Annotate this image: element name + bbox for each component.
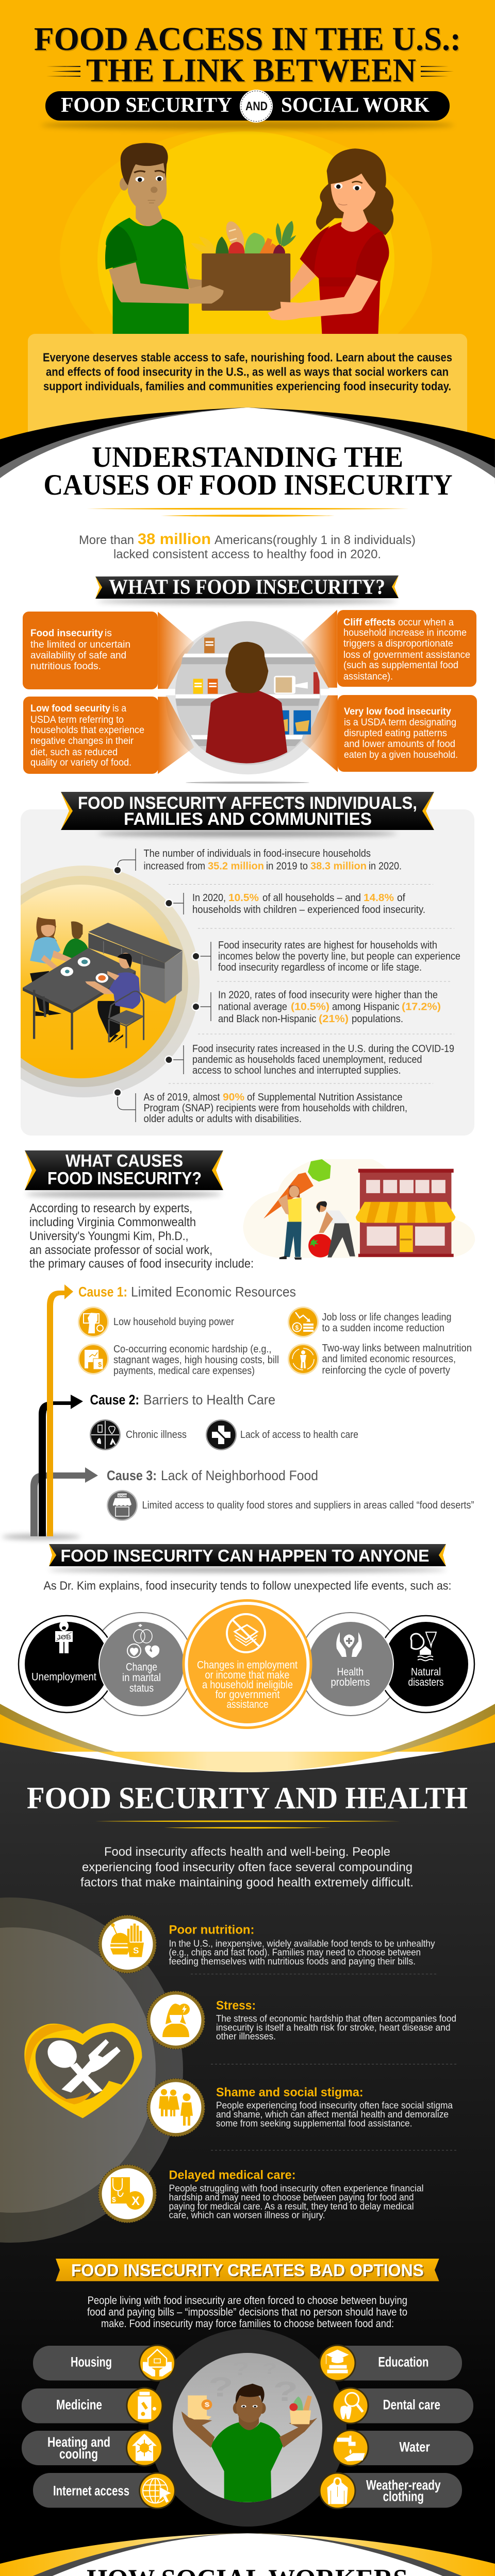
icon: heart with spoon and fork bbox=[24, 2023, 142, 2118]
center disc: man weighing choices: $ bbox=[205, 2402, 209, 2409]
factor: delayed medical care: hardship and may need to choose between paying for food and bbox=[169, 2192, 414, 2202]
health dividers bbox=[191, 1974, 458, 2150]
box: very low food insecurity: eaten by a given household. bbox=[344, 750, 458, 760]
event: changes in employment or income: Changes in employment bbox=[197, 1659, 298, 1671]
stat 3: food insecurity regardless of income or life stage. bbox=[218, 962, 422, 973]
box: food insecurity bbox=[23, 612, 158, 689]
section title: food security and health: FOOD SECURITY AND HEALTH bbox=[27, 1781, 468, 1815]
black arrow bbox=[39, 1395, 83, 1536]
health intro: experiencing food insecurity often face several compounding bbox=[82, 1860, 412, 1874]
stat 2: of all households – and bbox=[262, 892, 361, 904]
unemployment icon and label bbox=[31, 1621, 96, 1683]
event: unemployment bbox=[19, 1616, 116, 1713]
event: marital status: Change bbox=[126, 1661, 157, 1673]
stat 1: in 2020. bbox=[369, 860, 402, 872]
stat 1: 38.3 million bbox=[310, 860, 367, 872]
stat 2: 10.5% bbox=[228, 892, 259, 904]
event: changes in employment or income: assistance bbox=[227, 1699, 268, 1710]
factor: stress: Stress: bbox=[216, 1998, 256, 2012]
event: natural disasters bbox=[377, 1616, 474, 1713]
box: cliff effects: occur when a bbox=[398, 617, 454, 628]
box: very low food insecurity: Very low food insecurity bbox=[344, 706, 451, 717]
event: changes in employment or income: for government bbox=[216, 1689, 280, 1701]
bad options intro bbox=[87, 2295, 407, 2330]
banner: can happen to anyone bbox=[49, 1544, 446, 1572]
event: natural disasters: Natural bbox=[411, 1666, 441, 1678]
event: changes in employment or income: or income that make bbox=[205, 1669, 290, 1681]
stat 5: pandemic as households faced unemployment, reduced bbox=[192, 1054, 422, 1065]
box: cliff effects: Cliff effects bbox=[343, 617, 395, 628]
hero section bbox=[0, 0, 495, 448]
stat 4: and Black non-Hispanic bbox=[218, 1013, 317, 1025]
banner: creates bad options: FOOD INSECURITY CREATES BAD OPTIONS bbox=[71, 2261, 424, 2280]
center illustration: person at shelves bbox=[158, 610, 338, 774]
box: low food security bbox=[23, 697, 158, 774]
dividers bbox=[169, 884, 454, 1083]
event: changes in employment or income: a household ineligible bbox=[202, 1679, 293, 1691]
option: weather-ready clothing: Weather-ready bbox=[366, 2477, 441, 2493]
stat 2 bbox=[164, 892, 425, 916]
stat 4: (17.2%) bbox=[402, 1002, 441, 1013]
health intro bbox=[80, 1845, 414, 1890]
ribbon: food insecurity affects: FOOD INSECURITY AFFECTS INDIVIDUALS, bbox=[78, 793, 417, 813]
option: education bbox=[319, 2344, 462, 2381]
box: very low food insecurity: is a USDA term designating bbox=[344, 717, 456, 728]
curved transition into social work section bbox=[0, 2533, 495, 2576]
factor: delayed medical care: People struggling with food insecurity often experience financial bbox=[169, 2183, 424, 2194]
factor: shame and social stigma: and shame, which can affect mental health and demoralize bbox=[216, 2109, 449, 2120]
option: housing: Housing bbox=[71, 2354, 112, 2370]
factor: stress: other illnesses. bbox=[216, 2031, 276, 2041]
option: internet access: Internet access bbox=[53, 2483, 129, 2499]
stat 1: The number of individuals in food-insecure households bbox=[143, 848, 371, 859]
box: food insecurity: availability of safe and bbox=[30, 650, 126, 661]
stat 5: Food insecurity rates increased in the U.S. during the COVID-19 bbox=[192, 1043, 454, 1055]
icon: store: STORE bbox=[118, 1495, 128, 1498]
icon: bills: $ bbox=[98, 1361, 102, 1368]
icon: income loss bbox=[288, 1307, 319, 1337]
cause 1: Job loss or life changes leading bbox=[322, 1312, 452, 1323]
stat 6: of Supplemental Nutrition Assistance bbox=[247, 1092, 402, 1103]
cause 1: reinforcing the cycle of poverty bbox=[322, 1365, 450, 1376]
factor: delayed medical care: care, which can worsen illness or injury. bbox=[169, 2210, 325, 2220]
factor: shame and social stigma: People experiencing food insecurity often face social stigma bbox=[216, 2100, 453, 2111]
box: cliff effects: triggers a disproportionate bbox=[343, 638, 453, 649]
icon: store bbox=[107, 1490, 138, 1521]
causes intro text bbox=[29, 1201, 254, 1271]
gray arrow bbox=[30, 1467, 98, 1536]
life events circles bbox=[19, 1599, 474, 1729]
causes intro text: According to research by experts, bbox=[29, 1201, 192, 1215]
illustration: family at table bbox=[23, 917, 183, 1049]
title pill: SOCIAL WORK bbox=[281, 93, 430, 116]
event: health problems: problems bbox=[331, 1676, 370, 1688]
health intro: Food insecurity affects health and well-being. People bbox=[104, 1845, 390, 1859]
box: low food security: USDA term referring to bbox=[30, 715, 124, 725]
factor: poor nutrition: Poor nutrition: bbox=[169, 1923, 255, 1937]
causes intro text: the primary causes of food insecurity include: bbox=[29, 1257, 254, 1271]
cause 1: Limited Economic Resources bbox=[131, 1284, 296, 1299]
bad options intro: make. Food insecurity may force families to choose between food and: bbox=[101, 2318, 394, 2330]
cause 1: Co-occurring economic hardship (e.g., bbox=[113, 1344, 271, 1355]
option: heating and cooling: cooling bbox=[59, 2446, 98, 2462]
main title: THE LINK BETWEEN bbox=[86, 52, 416, 89]
option: housing bbox=[33, 2344, 176, 2381]
box: low food security: negative changes in their bbox=[30, 736, 134, 747]
factor: delayed medical care bbox=[98, 2165, 424, 2223]
option: weather-ready clothing: clothing bbox=[383, 2489, 424, 2504]
causes intro text: including Virginia Commonwealth bbox=[29, 1215, 196, 1229]
center disc: man weighing choices: ? bbox=[208, 2371, 234, 2402]
box: cliff effects: (such as supplemental food bbox=[343, 660, 458, 671]
option: heating and cooling: Heating and bbox=[47, 2434, 110, 2450]
stat 3: incomes below the poverty line, but people can experience bbox=[218, 951, 460, 962]
intro panel bbox=[28, 334, 467, 447]
stat 2: of bbox=[397, 892, 405, 904]
factor: poor nutrition: feeding themselves with nutritious foods and paying their bills. bbox=[169, 1956, 416, 1967]
life events intro: As Dr. Kim explains, food insecurity tends to follow unexpected life events, such as: bbox=[43, 1579, 452, 1592]
stat intro: 38 million: lacked consistent access to healthy food in 2020. bbox=[113, 548, 381, 562]
section title: understanding the causes: UNDERSTANDING THE bbox=[92, 441, 403, 473]
cause 1: Two-way links between malnutrition bbox=[322, 1343, 472, 1354]
event: marital status: in marital bbox=[122, 1672, 161, 1684]
stat 4: national average bbox=[218, 1002, 287, 1013]
banner: creates bad options: FOOD INSECURITY CREATES BAD OPTIONS bbox=[72, 2262, 425, 2281]
stat 4: populations. bbox=[352, 1013, 403, 1025]
causes intro text: University's Youngmi Kim, Ph.D., bbox=[29, 1229, 189, 1243]
bad options intro: People living with food insecurity are often forced to choose between buying bbox=[88, 2295, 407, 2307]
icon: medical bill: X bbox=[131, 2194, 140, 2208]
option: water bbox=[332, 2430, 473, 2467]
banner: what causes food insecurity bbox=[25, 1150, 223, 1198]
section title: understanding the causes bbox=[43, 441, 453, 517]
cause 3: Cause 3: bbox=[107, 1468, 157, 1483]
icon: chronic illness bbox=[90, 1419, 121, 1450]
ribbon: food insecurity affects bbox=[61, 792, 434, 837]
event: natural disasters: disasters bbox=[408, 1676, 443, 1688]
man bbox=[105, 143, 223, 334]
woman bbox=[268, 148, 393, 334]
stat 2: In 2020, bbox=[192, 892, 226, 904]
factor: stress: insecurity is itself a health risk for stroke, heart disease and bbox=[216, 2023, 451, 2033]
backdrop circles and heart icon bbox=[0, 1897, 183, 2243]
factor: delayed medical care: paying for medical care. As a result, they tend to delay medical bbox=[169, 2201, 414, 2211]
factor: stress bbox=[147, 1991, 456, 2049]
box: low food security: Low food security bbox=[30, 703, 110, 714]
icon: stressed woman bbox=[147, 1991, 205, 2049]
icon: medical bill: $ bbox=[112, 2195, 116, 2204]
box: food insecurity: Food insecurity bbox=[30, 628, 103, 639]
panel: food insecurity affects bbox=[0, 792, 474, 1136]
cause 1: Cause 1: bbox=[78, 1284, 127, 1299]
box: low food security: diet, such as reduced bbox=[30, 747, 118, 758]
illustration: man and woman sharing a food box bbox=[105, 143, 393, 334]
cause 2: Cause 2: bbox=[90, 1392, 139, 1408]
cause 3 bbox=[107, 1468, 474, 1521]
unemployment icon and label: Unemployment bbox=[31, 1671, 96, 1683]
title pill bbox=[41, 90, 454, 130]
stat 1: in 2019 to bbox=[266, 860, 308, 872]
box: food insecurity: is bbox=[105, 628, 112, 639]
option: water: Water bbox=[399, 2439, 430, 2454]
banner: what causes food insecurity: FOOD INSECURITY? bbox=[47, 1168, 202, 1188]
center disc: man weighing choices: ? bbox=[232, 2358, 250, 2379]
box: low food security: quality or variety of food. bbox=[30, 757, 131, 768]
cause 2: Barriers to Health Care bbox=[143, 1392, 275, 1408]
center disc: man weighing choices: ? bbox=[262, 2360, 277, 2378]
curved transition into causes section bbox=[0, 408, 495, 585]
circle backdrop bbox=[21, 866, 200, 1097]
cause 2 bbox=[90, 1392, 358, 1450]
option: medicine: Medicine bbox=[56, 2397, 102, 2412]
cause 3: Lack of Neighborhood Food bbox=[161, 1468, 318, 1483]
stat 6: older adults or adults with disabilities. bbox=[143, 1113, 302, 1125]
box: very low food insecurity bbox=[338, 695, 477, 772]
box: cliff effects bbox=[337, 610, 476, 687]
cause arrows bbox=[2, 1284, 98, 1539]
stat 6 bbox=[113, 1088, 407, 1125]
banner: what is food insecurity: WHAT IS FOOD INSECURITY? bbox=[109, 575, 385, 599]
event: health problems bbox=[307, 1621, 394, 1707]
icon: fast food: S bbox=[133, 1946, 139, 1956]
cause 1: to a sudden income reduction bbox=[322, 1323, 444, 1334]
box: cliff effects: assistance). bbox=[343, 671, 393, 682]
box: very low food insecurity: disrupted eating patterns bbox=[344, 728, 447, 739]
stat 6: As of 2019, almost bbox=[143, 1092, 220, 1103]
food box bbox=[188, 219, 303, 320]
factor: poor nutrition: (e.g., chips and fast food). Families may need to choose between bbox=[169, 1947, 421, 1958]
stat 4: among Hispanic bbox=[332, 1002, 399, 1013]
icon: cycle bbox=[288, 1344, 319, 1375]
option: heating and cooling bbox=[22, 2430, 163, 2467]
box: food insecurity: the limited or uncertain bbox=[30, 639, 130, 650]
center disc: man weighing choices: ? bbox=[273, 2376, 298, 2407]
stat 6: Program (SNAP) recipients were from households with children, bbox=[143, 1103, 407, 1114]
box: cliff effects: household increase in income bbox=[343, 628, 467, 638]
option: weather-ready clothing bbox=[319, 2472, 462, 2509]
icon: fast food bbox=[98, 1916, 156, 1973]
stat 5: access to school lunches and interrupted supplies. bbox=[192, 1065, 401, 1076]
stat 4: (21%) bbox=[319, 1013, 349, 1025]
factor: shame and social stigma: some from seeking supplemental food assistance. bbox=[216, 2119, 412, 2129]
event: health problems: Health bbox=[337, 1666, 364, 1678]
factor: poor nutrition: In the U.S., inexpensive, widely available food tends to be unhealthy bbox=[169, 1938, 435, 1948]
icon: group of people bbox=[147, 2079, 205, 2137]
cause 2: Lack of access to health care bbox=[240, 1429, 358, 1440]
center disc: man weighing choices bbox=[148, 2329, 346, 2527]
cause 2: Chronic illness bbox=[126, 1429, 187, 1440]
option: dental care bbox=[332, 2387, 473, 2424]
option: education: Education bbox=[378, 2354, 428, 2370]
stat 4 bbox=[192, 989, 441, 1025]
stat 1: increased from bbox=[143, 860, 205, 872]
decorative speed lines bbox=[46, 66, 454, 77]
stat 3: Food insecurity rates are highest for households with bbox=[218, 940, 437, 951]
option pills bbox=[22, 2344, 473, 2509]
option: dental care: Dental care bbox=[383, 2397, 440, 2412]
box: low food security: is a bbox=[112, 703, 126, 714]
gold arrow bbox=[47, 1284, 73, 1536]
stat intro: 38 million: More than bbox=[79, 533, 134, 547]
factor: stress: The stress of economic hardship that often accompanies food bbox=[216, 2013, 456, 2024]
main title: FOOD ACCESS IN THE U.S.: bbox=[34, 21, 461, 58]
option: medicine bbox=[22, 2387, 163, 2424]
event: marital status: status bbox=[129, 1683, 154, 1694]
stat 1: 35.2 million bbox=[208, 860, 264, 872]
cause 1: and limited economic resources, bbox=[322, 1353, 456, 1365]
stat 4: In 2020, rates of food insecurity were higher than the bbox=[218, 989, 438, 1001]
ribbon: food insecurity affects: FAMILIES AND COMMUNITIES bbox=[124, 809, 372, 829]
event: marital status bbox=[98, 1621, 185, 1707]
curved transition into health section bbox=[0, 1704, 495, 2576]
bad options intro: food and paying bills – “impossible” decisions that no person should have to bbox=[87, 2306, 407, 2318]
factor: shame and social stigma: Shame and social stigma: bbox=[216, 2086, 364, 2099]
event: changes in employment or income bbox=[183, 1599, 312, 1729]
icon: income loss: $ bbox=[295, 1324, 299, 1331]
stat 2: 14.8% bbox=[364, 892, 394, 904]
icon: buying power bbox=[78, 1307, 109, 1337]
box: very low food insecurity: and lower amounts of food bbox=[344, 739, 455, 750]
banner: what causes food insecurity: WHAT CAUSES bbox=[65, 1151, 183, 1171]
section title: food security and health bbox=[27, 1781, 468, 1828]
factor: shame and social stigma bbox=[147, 2079, 453, 2137]
icon: medical bill bbox=[98, 2165, 156, 2223]
stat 3 bbox=[192, 940, 460, 973]
factor: poor nutrition bbox=[98, 1916, 435, 1973]
box: cliff effects: loss of government assistance bbox=[343, 650, 470, 660]
section title: understanding the causes: CAUSES OF FOOD INSECURITY bbox=[43, 469, 453, 501]
factor: delayed medical care: Delayed medical care: bbox=[169, 2168, 296, 2182]
cause 1 bbox=[78, 1284, 472, 1377]
stat 4: (10.5%) bbox=[291, 1002, 329, 1013]
definition boxes bbox=[23, 610, 477, 774]
stat 5 bbox=[164, 1043, 454, 1076]
box: low food security: households that experience bbox=[30, 725, 144, 736]
stat intro: 38 million: 38 million bbox=[138, 531, 211, 548]
stat 2: households with children – experienced food insecurity. bbox=[192, 904, 425, 916]
cause 1: stagnant wages, high housing costs, bill bbox=[113, 1354, 279, 1366]
main title bbox=[34, 21, 461, 89]
causes intro text: an associate professor of social work, bbox=[29, 1243, 212, 1257]
stat 6: 90% bbox=[223, 1092, 244, 1103]
stat intro: 38 million: Americans(roughly 1 in 8 individuals) bbox=[214, 533, 416, 547]
title pill: AND bbox=[245, 99, 268, 113]
cause 1: Low household buying power bbox=[113, 1316, 234, 1328]
icon: bills bbox=[78, 1344, 109, 1375]
health intro: factors that make maintaining good health extremely difficult. bbox=[80, 1876, 414, 1890]
illustration: grocery store with oversized food bbox=[243, 1159, 475, 1260]
box: food insecurity: nutritious foods. bbox=[30, 661, 101, 672]
icon: no health care bbox=[206, 1419, 237, 1450]
stat 1 bbox=[113, 848, 402, 875]
cause 1: payments, medical care expenses) bbox=[113, 1365, 255, 1377]
banner: can happen to anyone: FOOD INSECURITY CAN HAPPEN TO ANYONE bbox=[61, 1547, 429, 1566]
stat intro: 38 million bbox=[79, 531, 416, 562]
unemployment icon and label: JOB bbox=[57, 1634, 71, 1641]
option: internet access bbox=[33, 2472, 176, 2509]
title pill: FOOD SECURITY bbox=[61, 93, 232, 116]
